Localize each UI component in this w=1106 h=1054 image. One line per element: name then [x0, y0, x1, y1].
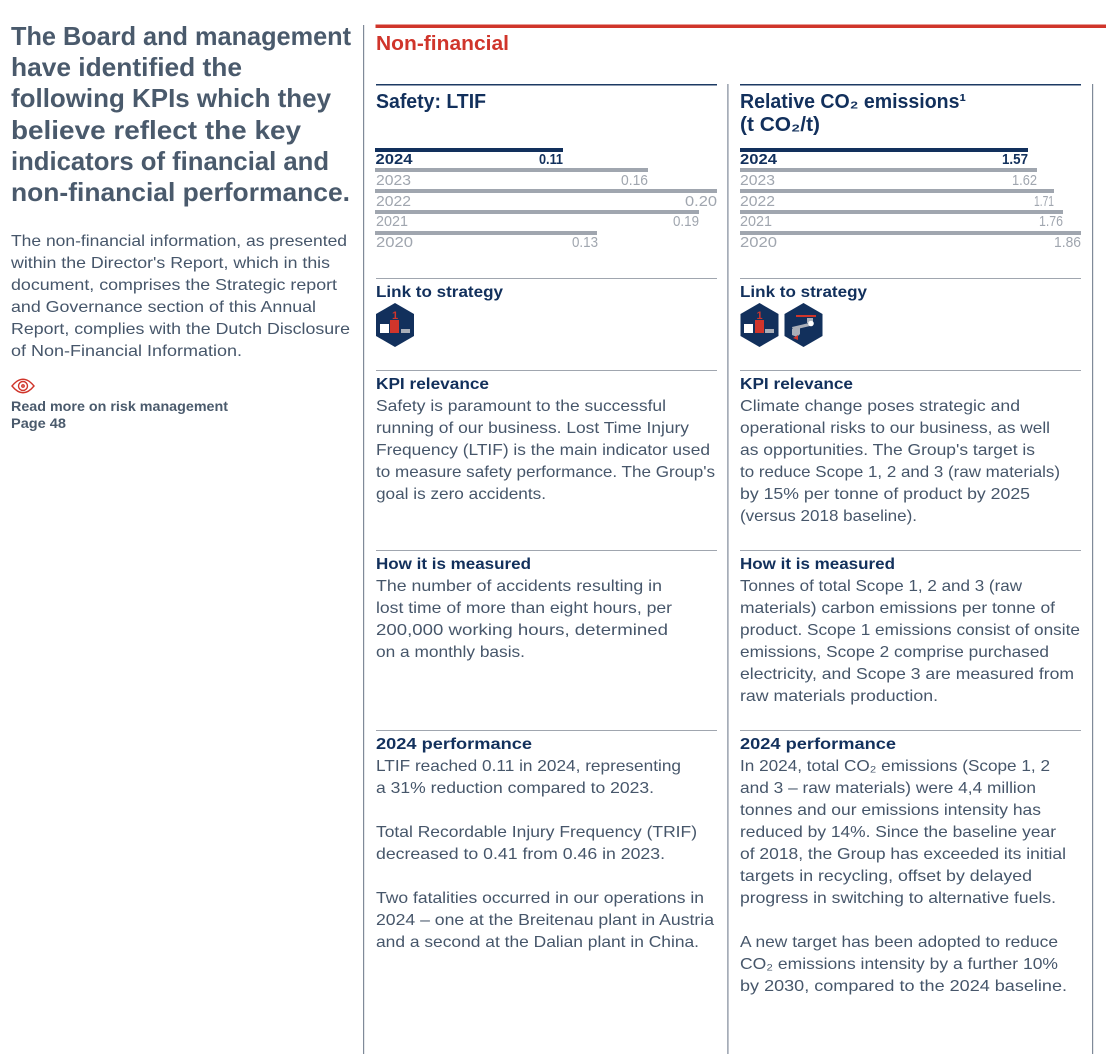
text block: 2024 performance: tonnes and our emissions intensity has [740, 802, 1041, 819]
text block: KPI relevance: Climate change poses strategic and [740, 398, 1020, 415]
icon: eye [12, 379, 34, 393]
heading: relative CO2 emissions: Relative CO₂ emissions¹ [740, 91, 966, 113]
bar chart: LTIF: 2024 [376, 151, 413, 168]
text block: KPI relevance [740, 376, 1060, 525]
text block: 2024 performance: CO₂ emissions intensity by a further 10% [740, 956, 1058, 973]
left heading: indicators of financial and [11, 146, 329, 176]
left intro text: Report, complies with the Dutch Disclosure [11, 321, 350, 338]
bar chart: CO2: 1.62 [1012, 172, 1037, 189]
icon: podium hexagon: 1 [756, 310, 763, 322]
text block: KPI relevance: operational risks to our business, as well [740, 420, 1050, 437]
bar chart: LTIF: 0.11 [539, 151, 563, 168]
bar chart: LTIF: 2023 [376, 172, 411, 189]
text block: how it is measured: The number of accidents resulting in [376, 578, 662, 595]
text block: 2024 performance: LTIF reached 0.11 in 2024, representing [376, 758, 681, 775]
left heading: non-financial performance. [11, 177, 350, 207]
section header: non-financial: Non-financial [376, 33, 509, 55]
icon: podium hexagon [740, 303, 778, 347]
text block: KPI relevance: KPI relevance [376, 376, 489, 393]
text block: KPI relevance: (versus 2018 baseline). [740, 508, 917, 525]
text block: KPI relevance [376, 376, 715, 503]
text block: 2024 performance: Two fatalities occurred in our operations in [376, 890, 704, 907]
text block: how it is measured: product. Scope 1 emissions consist of onsite [740, 622, 1080, 639]
text block: how it is measured: materials) carbon emissions per tonne of [740, 600, 1056, 617]
text block: 2024 performance: progress in switching to alternative fuels. [740, 890, 1056, 907]
bar chart: LTIF: 2020 [376, 234, 413, 251]
text block: 2024 performance: and a second at the Dalian plant in China. [376, 934, 699, 951]
bar chart: CO2: 1.76 [1039, 213, 1063, 230]
read more link [11, 398, 228, 431]
text block: 2024 performance: 2024 performance [740, 736, 896, 753]
text block: 2024 performance: In 2024, total CO₂ emissions (Scope 1, 2 [740, 758, 1050, 775]
bar chart: CO2 [740, 148, 1081, 251]
heading: relative CO2 emissions: (t CO₂/t) [740, 114, 820, 136]
left intro text [10, 233, 350, 360]
heading: link to strategy: Link to strategy [740, 284, 867, 301]
text block: KPI relevance: by 15% per tonne of product by 2025 [740, 486, 1030, 503]
bar chart: CO2: 2021 [740, 213, 772, 230]
icon: process hexagon [784, 303, 822, 347]
bar chart: CO2: 2020 [740, 234, 777, 251]
text block: 2024 performance: and 3 – raw materials) were 4,4 million [740, 780, 1036, 797]
bar chart: LTIF: 2021 [376, 213, 408, 230]
read more link: Page 48 [11, 415, 66, 431]
text block: 2024 performance: by 2030, compared to the 2024 baseline. [740, 978, 1067, 995]
text block: KPI relevance: as opportunities. The Group's target is [740, 442, 1035, 459]
text block: KPI relevance: KPI relevance [740, 376, 853, 393]
left heading: believe reflect the key [11, 115, 302, 145]
bar chart: CO2: 1.57 [1002, 151, 1028, 168]
text block: how it is measured: How it is measured [376, 556, 531, 573]
text block: KPI relevance: to reduce Scope 1, 2 and 3 (raw materials) [740, 464, 1060, 481]
text block: how it is measured: How it is measured [740, 556, 895, 573]
bar chart: LTIF: 0.16 [621, 172, 648, 189]
text block: 2024 performance: targets in recycling, offset by delayed [740, 868, 1032, 885]
panel: relative CO2 emissions [740, 84, 1081, 995]
text block: 2024 performance [376, 736, 714, 951]
text block: 2024 performance: Total Recordable Injury Frequency (TRIF) [376, 824, 697, 841]
text block: how it is measured: lost time of more than eight hours, per [376, 600, 673, 617]
text block: 2024 performance: of 2018, the Group has exceeded its initial [740, 846, 1066, 863]
text block: how it is measured: emissions, Scope 2 comprise purchased [740, 644, 1049, 661]
text block: how it is measured [740, 556, 1080, 705]
text block: how it is measured [376, 556, 673, 661]
left intro text: within the Director's Report, which in this [10, 255, 330, 272]
text block: KPI relevance: goal is zero accidents. [376, 486, 546, 503]
text block: 2024 performance [740, 736, 1067, 995]
bar chart: LTIF: 0.13 [572, 234, 598, 251]
left heading: The Board and management [11, 21, 351, 51]
bar chart: LTIF: 0.19 [673, 213, 699, 230]
icon: podium hexagon: 1 [392, 310, 398, 322]
text block: how it is measured: on a monthly basis. [376, 644, 525, 661]
icon: podium hexagon [376, 303, 414, 347]
bar chart: LTIF: 0.20 [685, 193, 717, 210]
bar chart: LTIF: 2022 [376, 193, 411, 210]
bar chart: CO2: 2023 [740, 172, 775, 189]
text block: KPI relevance: Safety is paramount to the successful [376, 398, 666, 415]
text block: how it is measured: raw materials production. [740, 688, 938, 705]
bar chart: LTIF [375, 148, 717, 251]
text block: KPI relevance: running of our business. Lost Time Injury [376, 420, 689, 437]
heading: link to strategy: Link to strategy [376, 284, 503, 301]
left intro text: and Governance section of this Annual [11, 299, 316, 316]
bar chart: CO2: 2024 [740, 151, 778, 168]
text block: how it is measured: Tonnes of total Scope 1, 2 and 3 (raw [740, 578, 1022, 595]
left heading: following KPIs which they [11, 83, 332, 113]
heading: safety LTIF: Safety: LTIF [376, 91, 486, 113]
bar chart: CO2: 1.71 [1034, 193, 1054, 210]
left intro text: The non-financial information, as presented [11, 233, 347, 250]
text block: 2024 performance: 2024 – one at the Breitenau plant in Austria [376, 912, 714, 929]
text block: 2024 performance: a 31% reduction compared to 2023. [376, 780, 654, 797]
text block: KPI relevance: Frequency (LTIF) is the main indicator used [376, 442, 710, 459]
bar chart: CO2: 1.86 [1054, 234, 1081, 251]
heading: relative CO2 emissions [740, 91, 966, 136]
text block: how it is measured: electricity, and Scope 3 are measured from [740, 666, 1074, 683]
section header: non-financial [376, 24, 1106, 55]
text block: 2024 performance: 2024 performance [376, 736, 532, 753]
read more link: Read more on risk management [11, 398, 228, 414]
left heading [11, 21, 351, 207]
bar chart: CO2: 2022 [740, 193, 775, 210]
text block: 2024 performance: decreased to 0.41 from 0.46 in 2023. [376, 846, 665, 863]
text block: 2024 performance: A new target has been adopted to reduce [740, 934, 1058, 951]
left intro text: of Non-Financial Information. [11, 343, 242, 360]
left intro text: document, comprises the Strategic report [11, 277, 338, 294]
left heading: have identified the [11, 52, 242, 82]
text block: 2024 performance: reduced by 14%. Since the baseline year [740, 824, 1057, 841]
panel: safety LTIF [375, 84, 717, 951]
text block: KPI relevance: to measure safety performance. The Group's [376, 464, 715, 481]
text block: how it is measured: 200,000 working hours, determined [376, 622, 668, 639]
